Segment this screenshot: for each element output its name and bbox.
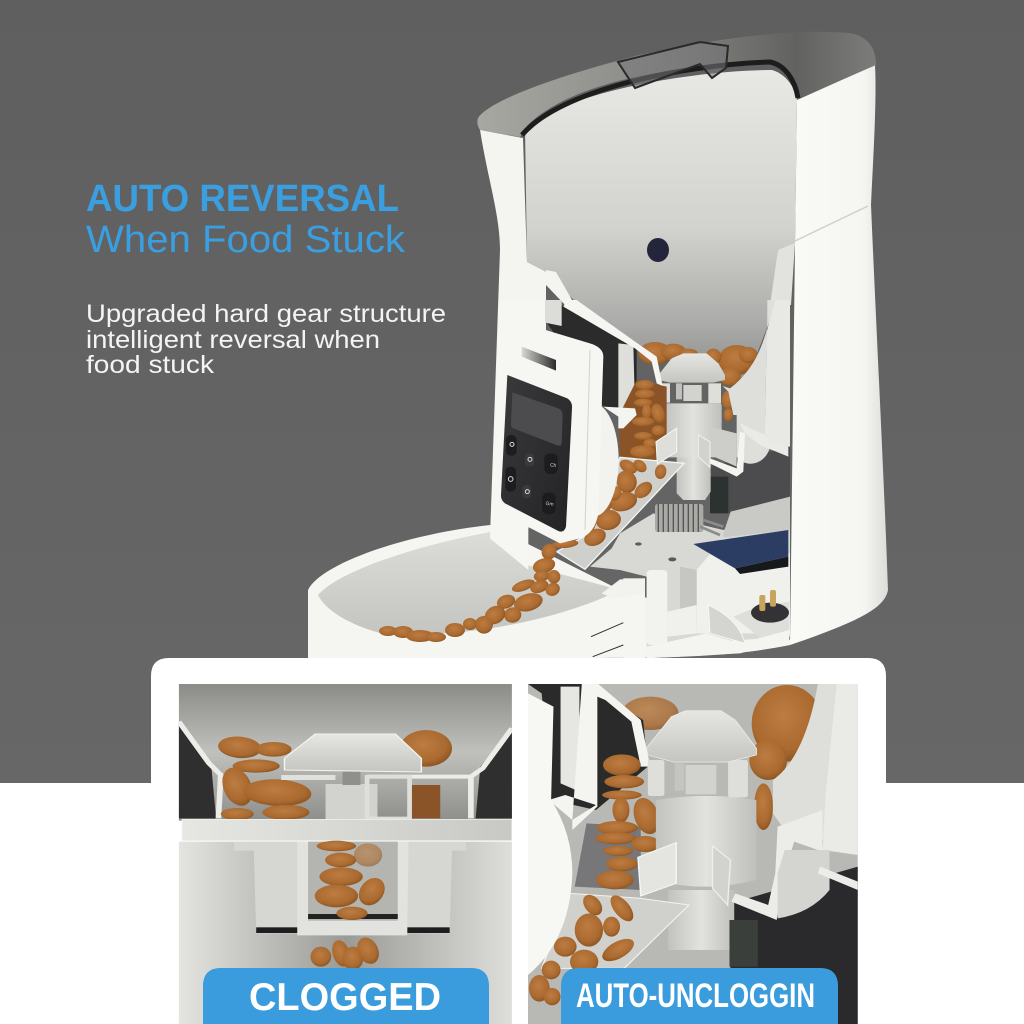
shell lower flange bbox=[490, 300, 545, 570]
dispensing cylinder bbox=[648, 760, 756, 950]
hopper interior bbox=[525, 70, 797, 385]
chute backing bbox=[618, 380, 667, 460]
feeder lid bbox=[477, 32, 876, 137]
detail panels bbox=[179, 684, 858, 1024]
left tower shell bbox=[480, 130, 546, 537]
kibble trail in bowl bbox=[379, 616, 493, 642]
dispensing ramp bbox=[557, 457, 684, 569]
kibble: chute bbox=[310, 841, 389, 970]
description text: food stuck bbox=[86, 351, 215, 379]
cross bar bbox=[182, 819, 512, 841]
agitator cap bbox=[658, 353, 725, 383]
agitator cap bbox=[646, 711, 756, 762]
kibble in chute bbox=[630, 380, 668, 458]
agitator cap bbox=[284, 734, 421, 772]
flap right bbox=[713, 846, 730, 905]
label: clogged bbox=[203, 968, 489, 1024]
description text bbox=[86, 300, 446, 379]
power connector bbox=[733, 590, 789, 640]
flap left bbox=[656, 428, 677, 464]
right funnel wall bbox=[773, 684, 837, 840]
kibble on ramp bbox=[551, 457, 668, 549]
chute lower backing bbox=[575, 823, 641, 890]
control panel bbox=[497, 320, 603, 543]
hopper background bbox=[528, 684, 858, 1024]
gear housing bbox=[723, 497, 790, 537]
rear dark channel bbox=[545, 305, 637, 412]
kibble on ramp bbox=[529, 893, 639, 1005]
green coil bbox=[710, 477, 728, 513]
right funnel wall bbox=[723, 300, 790, 447]
dark rear cavity bbox=[710, 447, 790, 513]
kibble falling into bowl bbox=[475, 542, 562, 634]
kibble: jammed top bbox=[216, 730, 452, 820]
center shaft bbox=[281, 772, 410, 819]
panel: auto-unclogging bbox=[528, 684, 858, 1024]
base recess bbox=[680, 567, 697, 630]
front base wall bbox=[602, 570, 789, 658]
heading bbox=[86, 178, 406, 261]
description text: Upgraded hard gear structure bbox=[86, 300, 446, 328]
floor plate bbox=[590, 507, 790, 647]
right box bbox=[710, 415, 788, 477]
dark sides bbox=[179, 723, 512, 818]
heading: AUTO REVERSAL bbox=[86, 178, 399, 220]
flap left bbox=[638, 843, 676, 896]
panel: clogged bbox=[179, 684, 512, 1024]
baffle top bbox=[546, 270, 572, 306]
circuit board bbox=[693, 530, 788, 574]
dark lower region bbox=[730, 867, 858, 1024]
feeder right body shell bbox=[790, 65, 888, 645]
funnel wall top bbox=[770, 243, 795, 305]
chute lip bbox=[603, 407, 637, 428]
seam on body bbox=[795, 206, 868, 241]
right column bbox=[765, 300, 790, 447]
kibble stack bbox=[595, 754, 663, 889]
left chute walls bbox=[549, 684, 650, 830]
product: pet feeder cutaway bbox=[308, 32, 888, 658]
description text: intelligent reversal when bbox=[86, 326, 380, 354]
display window bbox=[511, 392, 563, 446]
vent slits bbox=[591, 623, 623, 657]
funnel walls bbox=[179, 722, 512, 818]
inner light rib bbox=[618, 343, 635, 413]
label: clogged: CLOGGED bbox=[249, 976, 441, 1019]
lower housing bbox=[234, 842, 466, 935]
coil bbox=[729, 920, 758, 967]
label: auto-unclogging bbox=[561, 968, 838, 1024]
spring bbox=[655, 504, 723, 535]
control buttons: Ch bbox=[550, 462, 557, 469]
rear food pile bbox=[638, 342, 758, 422]
hopper background bbox=[179, 684, 512, 821]
right box walls bbox=[731, 810, 858, 920]
dispensing cylinder bbox=[662, 383, 722, 500]
lower body bbox=[179, 842, 512, 1024]
control buttons bbox=[505, 435, 558, 514]
bolt holes bbox=[635, 542, 676, 561]
control buttons: Gm bbox=[545, 501, 554, 508]
rear kibble bbox=[622, 685, 822, 830]
internal mechanism bbox=[475, 300, 790, 658]
dark channel bbox=[528, 684, 648, 810]
control panel edge bbox=[528, 693, 572, 975]
left column bbox=[545, 300, 562, 326]
upper baffle bbox=[563, 300, 663, 386]
dispensing ramp bbox=[542, 893, 689, 968]
food bowl bbox=[308, 525, 790, 658]
background panel bbox=[0, 0, 1024, 783]
right outer column bbox=[822, 684, 858, 855]
white comparison card bbox=[151, 658, 886, 1024]
base block bbox=[697, 538, 790, 633]
flap right bbox=[698, 435, 710, 467]
label: auto-unclogging: AUTO-UNCLOGGIN bbox=[576, 977, 815, 1015]
heading: When Food Stuck bbox=[86, 219, 406, 261]
side bulge bbox=[568, 403, 619, 517]
